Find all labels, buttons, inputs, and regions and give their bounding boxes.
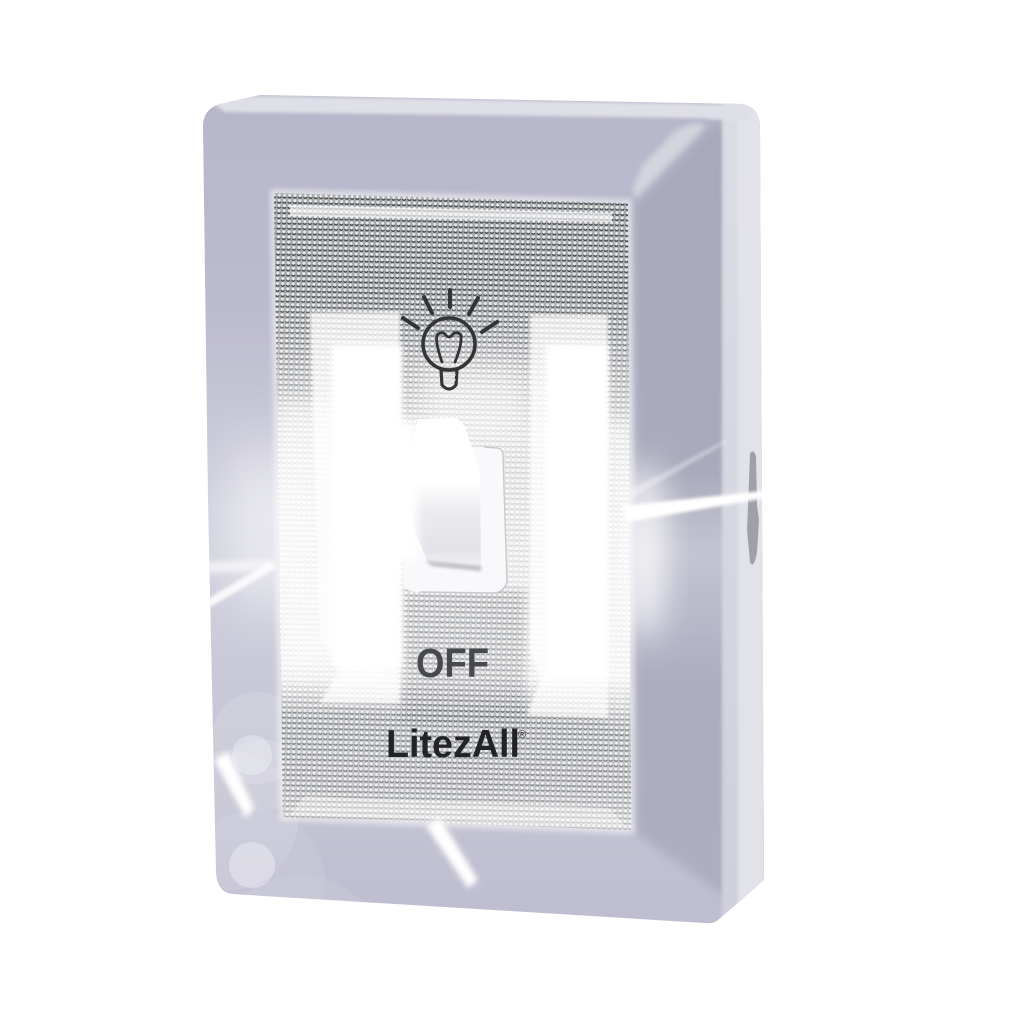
- right upper faint ray: [630, 440, 726, 498]
- panel edge glow: [274, 193, 631, 830]
- right horizontal ray: [622, 487, 800, 522]
- toggle paddle: [405, 418, 481, 568]
- right LED core: [546, 345, 608, 677]
- right side glow: [625, 460, 665, 640]
- left LED core: [332, 345, 402, 667]
- right rim: [720, 104, 748, 916]
- bottom center streak: [426, 818, 478, 888]
- product illustration: LitezAll switch light: [203, 95, 764, 924]
- top inner frame highlight: [290, 205, 612, 222]
- slider slot on side: [747, 451, 759, 564]
- lens panel: [270, 190, 635, 835]
- left lower ray: [130, 562, 276, 652]
- vertical light wash: [276, 299, 631, 830]
- bottom inner frame highlight: [290, 796, 625, 826]
- center column texture under switch: [395, 585, 530, 725]
- OFF label: OFF: [416, 640, 489, 686]
- right LED window: [527, 315, 608, 718]
- toggle switch: [388, 418, 507, 593]
- bottom left streak: [214, 752, 254, 818]
- right bevel face: [634, 122, 730, 900]
- center column haze: [420, 360, 530, 440]
- left switch glow: [388, 420, 418, 560]
- rim seam: [738, 108, 764, 923]
- panel texture: [270, 190, 635, 835]
- left side glow: [225, 440, 305, 620]
- toggle bottom shadow: [425, 561, 481, 571]
- glow and light rays: [130, 440, 800, 888]
- left glow fade: [277, 394, 328, 667]
- LitezAll logo: LitezAll: [386, 723, 520, 766]
- light bulb icon: [403, 290, 497, 389]
- registered mark: ®: [518, 729, 526, 741]
- device body: [203, 95, 764, 924]
- left LED window: [310, 312, 400, 703]
- left upper ray: [205, 560, 275, 574]
- corner chamfer highlight: [632, 124, 704, 198]
- bokeh circles: [214, 735, 324, 900]
- top rim highlight: [205, 96, 760, 122]
- switch plate: [403, 447, 507, 593]
- right glow fade: [605, 420, 635, 720]
- switch recess edge: [420, 447, 507, 593]
